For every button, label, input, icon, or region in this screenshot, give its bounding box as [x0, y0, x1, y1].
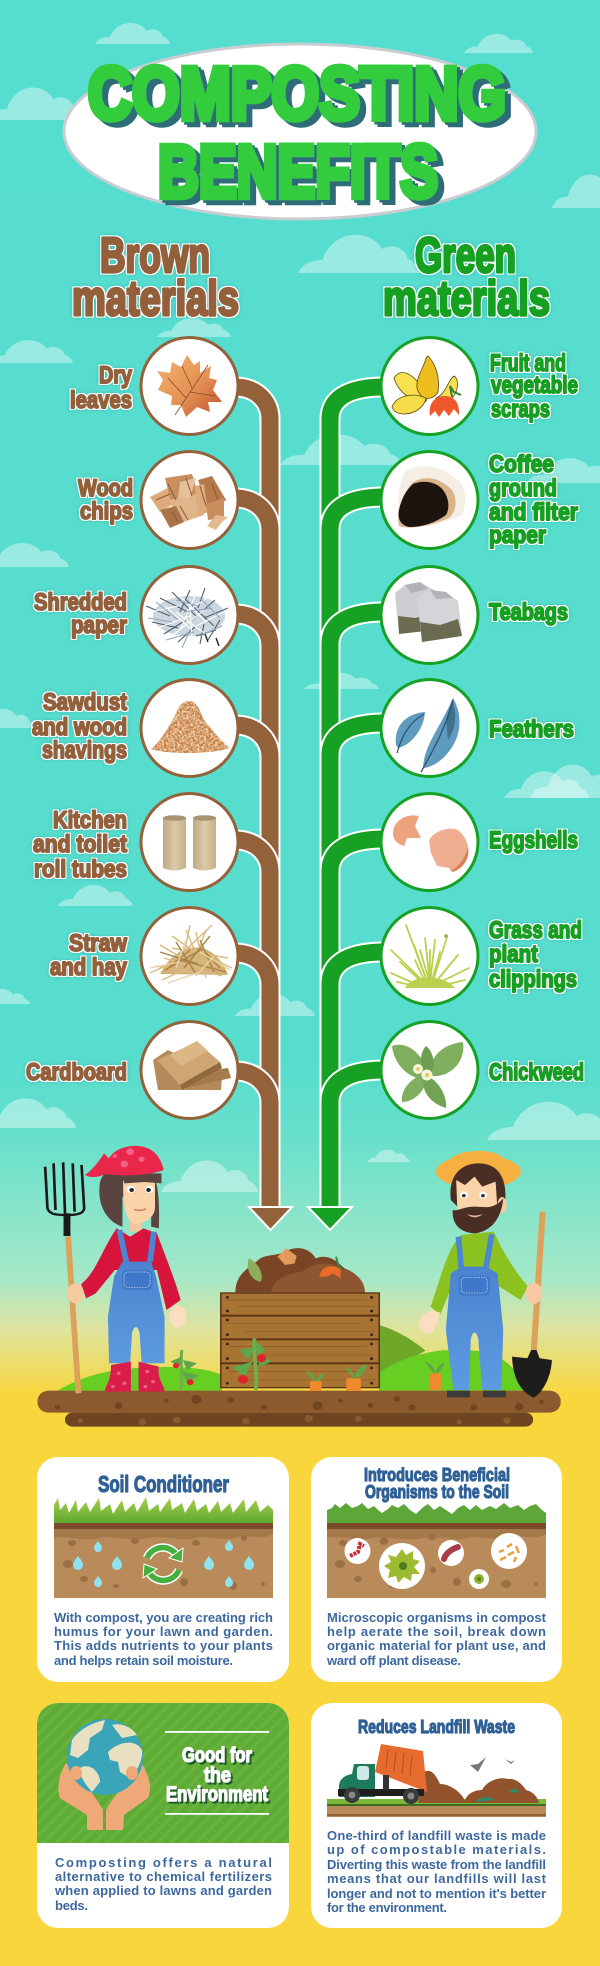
microbe bubbles — [344, 1533, 527, 1589]
soil illustration with microbes — [327, 1503, 546, 1598]
card body text: One-third of landfill waste is made — [327, 1828, 546, 1843]
icon: wood chips — [150, 474, 228, 530]
item circle: roll tubes — [141, 794, 238, 890]
card body text — [327, 1828, 547, 1915]
card: beneficial organisms — [311, 1457, 562, 1682]
ground soil — [38, 1391, 561, 1427]
icon: cardboard sheets — [153, 1041, 231, 1090]
item circle: teabags — [381, 566, 478, 664]
green labels: Coffee — [489, 451, 554, 478]
card body text: help aerate the soil, break down — [327, 1624, 546, 1639]
green labels: and filter — [489, 499, 578, 526]
brown connector arrows — [235, 387, 292, 1230]
icon: coffee filter — [398, 466, 465, 527]
green labels: Fruit and — [490, 350, 566, 377]
card body text — [326, 1610, 547, 1668]
green labels: scraps — [491, 396, 550, 423]
icon: sawdust pile — [151, 701, 230, 753]
green labels — [489, 350, 584, 1086]
card body text: Microscopic organisms in compost — [327, 1610, 547, 1625]
heading: green materials: materials — [383, 272, 550, 326]
plants and carrots — [170, 1338, 444, 1391]
dump truck at landfill illustration — [327, 1744, 546, 1817]
card body text: organic material for plant use, and — [327, 1638, 546, 1653]
card body text — [54, 1855, 272, 1913]
green labels: Feathers — [489, 716, 574, 743]
card body text: when applied to lawns and garden — [54, 1883, 272, 1898]
green labels: Teabags — [489, 599, 568, 626]
icon: maple leaf — [157, 355, 222, 417]
brown labels: paper — [71, 612, 127, 639]
icon: eggshells — [393, 815, 469, 872]
compost scene illustration — [38, 1146, 561, 1427]
green header panel — [37, 1703, 289, 1843]
item circle: straw — [141, 908, 238, 1004]
card body text: alternative to chemical fertilizers — [55, 1869, 272, 1884]
green connector arrows — [308, 387, 385, 1230]
icon: shredded paper — [146, 588, 228, 648]
item circle: eggshells — [381, 794, 478, 890]
decorative rule lines and heading — [165, 1731, 269, 1815]
heading: green materials — [383, 229, 550, 326]
decorative rule lines and heading: the — [204, 1764, 231, 1787]
green labels: vegetable — [491, 372, 578, 399]
brown labels: Dry — [99, 362, 133, 389]
card: reduces landfill waste — [311, 1703, 562, 1928]
card body text: and helps retain soil moisture. — [54, 1653, 233, 1668]
title text — [88, 52, 506, 213]
decorative rule lines and heading: Good for — [182, 1744, 252, 1767]
icon: feathers — [396, 698, 459, 772]
item circle: shredded paper — [141, 566, 238, 664]
item circle: dry leaves — [141, 338, 238, 434]
green labels: paper — [489, 522, 546, 549]
icon: grass clippings — [391, 925, 469, 988]
farmer man with shovel — [419, 1151, 552, 1398]
item circle: wood chips — [141, 452, 238, 548]
heading: brown materials — [72, 229, 239, 326]
brown labels: Sawdust — [43, 689, 127, 716]
item circle: sawdust — [141, 680, 238, 776]
icon: chickweed — [392, 1042, 463, 1108]
card body text: beds. — [55, 1898, 88, 1913]
heading: brown materials: Brown — [100, 229, 210, 283]
green labels: clippings — [489, 966, 577, 993]
brown labels: chips — [80, 498, 133, 525]
card title: Organisms to the Soil — [365, 1481, 509, 1502]
green labels: plant — [489, 941, 538, 968]
brown labels: Cardboard — [26, 1059, 127, 1086]
card body text: for the environment. — [327, 1900, 447, 1915]
card body text: ward off plant disease. — [326, 1653, 461, 1668]
brown labels: Kitchen — [53, 807, 127, 834]
icon: teabags — [395, 582, 462, 642]
card body text: up of compostable materials. — [327, 1842, 546, 1857]
title ellipse — [64, 44, 536, 219]
brown labels: shavings — [42, 737, 127, 764]
decorative rule lines and heading: Environment — [166, 1783, 268, 1806]
card body text: With compost, you are creating rich — [54, 1610, 273, 1625]
title text: BENEFITS — [158, 130, 438, 213]
card title: Introduces Beneficial — [364, 1464, 510, 1485]
card body text: longer and not to mention it's better — [327, 1886, 546, 1901]
clouds — [0, 23, 600, 1192]
item circle: chickweed — [381, 1022, 478, 1118]
card body text — [54, 1610, 273, 1668]
green labels: ground — [489, 475, 557, 502]
card title — [364, 1464, 510, 1502]
brown labels: Shredded — [34, 589, 127, 616]
item circle: grass — [381, 908, 478, 1004]
brown labels: Straw — [69, 930, 127, 957]
item circle: feathers — [381, 680, 478, 776]
item circle: coffee ground — [381, 452, 478, 548]
card body text: This adds nutrients to your plants — [54, 1638, 273, 1653]
heading: brown materials: materials — [72, 272, 239, 326]
heading: green materials: Green — [415, 229, 516, 283]
brown labels: and wood — [32, 714, 127, 741]
item circle: cardboard — [141, 1022, 238, 1118]
card title: Reduces Landfill Waste — [358, 1716, 515, 1737]
brown labels: Wood — [78, 475, 133, 502]
icon: kitchen rolls — [163, 815, 216, 870]
icon: straw and hay — [150, 925, 232, 983]
card body text: Diverting this waste from the landfill — [327, 1857, 546, 1872]
icon: hands holding globe — [58, 1719, 150, 1830]
card body text: Composting offers a natural — [55, 1855, 272, 1870]
title banner — [64, 44, 536, 219]
card: good for the environment — [37, 1703, 289, 1928]
icon: banana peel and orange — [392, 356, 457, 414]
item circle: fruit scraps — [381, 338, 478, 434]
compost heap — [235, 1248, 365, 1292]
brown labels: leaves — [70, 387, 132, 414]
brown labels — [26, 362, 133, 1086]
brown labels: and toilet — [33, 831, 127, 858]
farmer woman with pitchfork — [45, 1146, 186, 1393]
card title: Soil Conditioner — [98, 1471, 229, 1497]
brown labels: roll tubes — [34, 856, 127, 883]
green labels: Eggshells — [489, 827, 578, 854]
title text: COMPOSTING — [88, 52, 506, 135]
card: soil conditioner — [37, 1457, 289, 1682]
card body text: humus for your lawn and garden. — [54, 1624, 273, 1639]
brown labels: and hay — [50, 954, 128, 981]
icon: recycle arrows — [143, 1548, 183, 1580]
card body text: means that our landfills will last — [327, 1871, 547, 1886]
wooden compost bin — [220, 1292, 380, 1388]
soil illustration with water drops and recycle icon — [54, 1497, 273, 1598]
hills — [57, 1325, 524, 1391]
